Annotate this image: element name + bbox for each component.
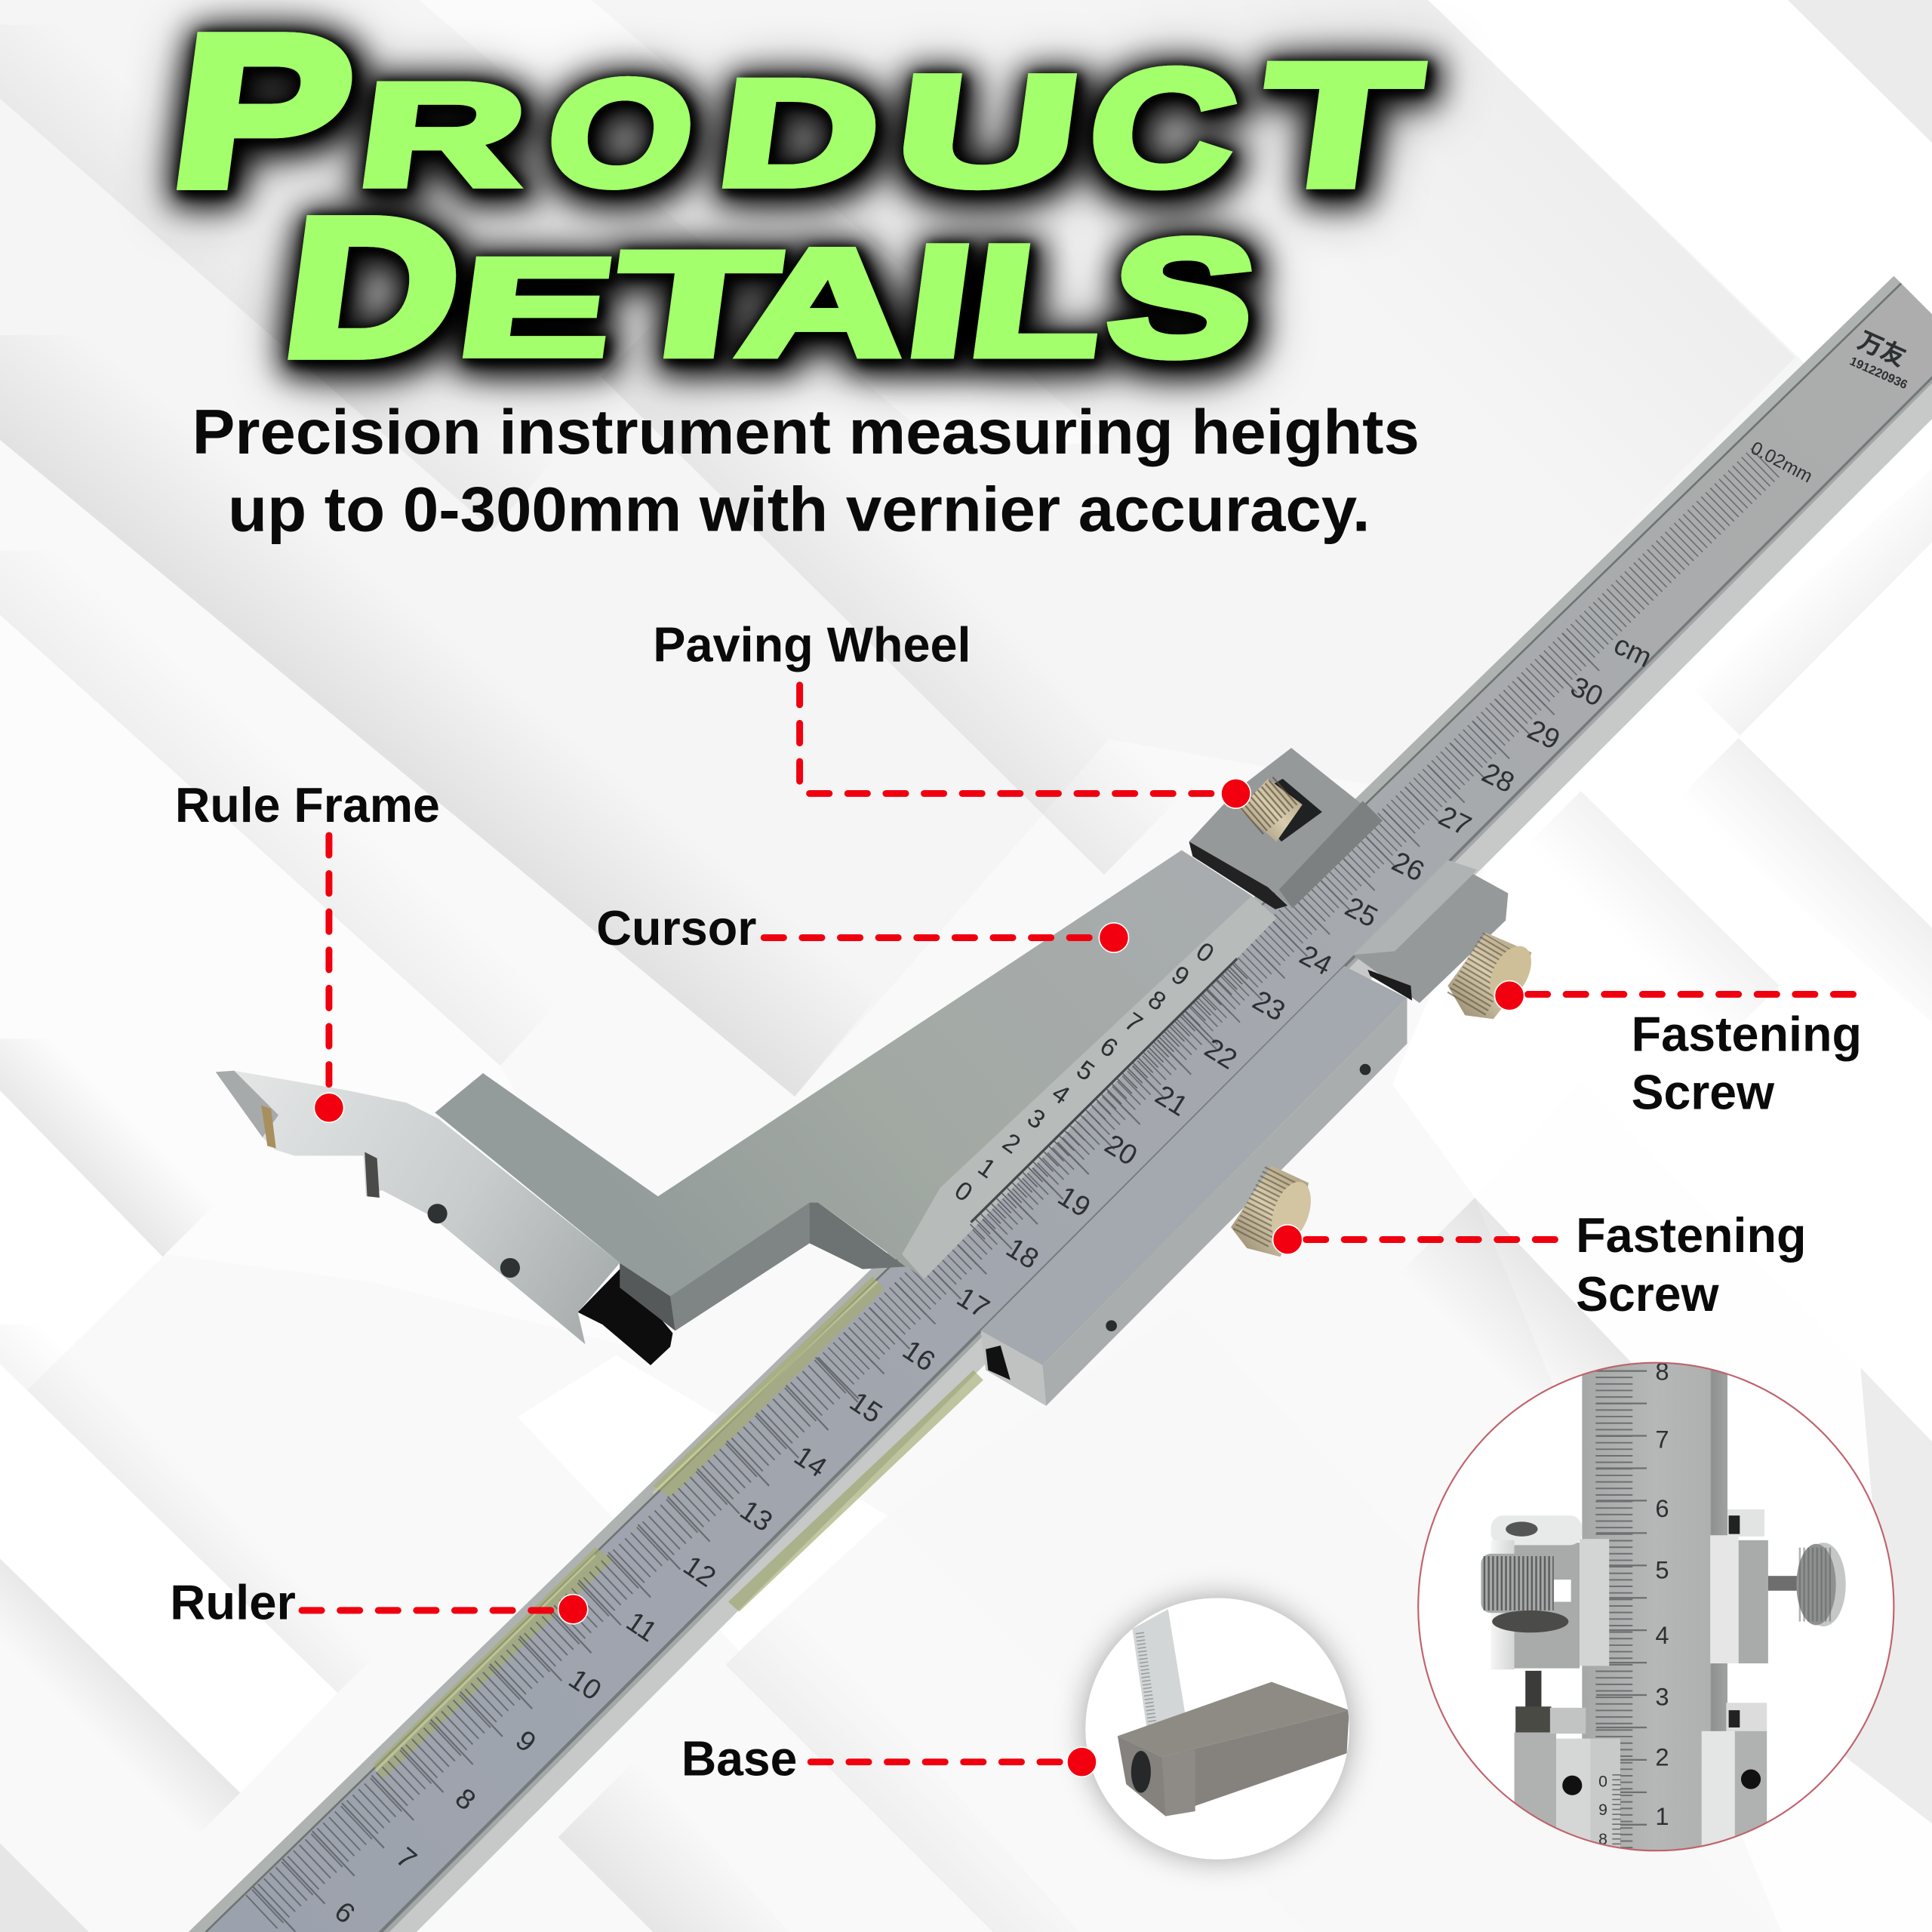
callout: Base: Base — [681, 1731, 797, 1786]
ruler numbers 6 to 30: 27 — [1434, 799, 1476, 841]
height gauge main ruler — [189, 276, 1932, 1932]
inset scale numbers: 9 — [1598, 1801, 1607, 1819]
ruler numbers 6 to 30: 11 — [621, 1605, 663, 1647]
ruler numbers 6 to 30 — [329, 326, 1910, 1930]
callout: Rule Frame — [175, 777, 440, 1122]
title: Product Details: R — [349, 53, 536, 216]
ruler numbers 6 to 30: 21 — [1150, 1078, 1193, 1122]
ruler numbers 6 to 30: 29 — [1523, 713, 1565, 755]
title: Product Details: S — [1098, 206, 1266, 390]
icon: fastening screw lower — [1231, 1165, 1318, 1257]
ruler numbers 6 to 30: 22 — [1199, 1032, 1243, 1075]
icon: paving wheel knurl — [1239, 779, 1303, 841]
ruler numbers 6 to 30: 24 — [1294, 939, 1337, 981]
right lower clamp — [1702, 1703, 1767, 1860]
title: Product Details: D — [273, 178, 473, 397]
ruler numbers 6 to 30: 17 — [952, 1281, 995, 1324]
callout: Fastening Screw lower — [1273, 1208, 1806, 1321]
callout: Fastening Screw lower: Screw — [1576, 1266, 1719, 1321]
ruler numbers 6 to 30: 6 — [329, 1895, 361, 1930]
ruler numbers 6 to 30: 30 — [1566, 670, 1608, 712]
ruler numbers 6 to 30: 8 — [450, 1782, 482, 1817]
title: Product Details: E — [450, 231, 623, 385]
rule frame jaw — [216, 1071, 672, 1365]
inset scale numbers: 0 — [1598, 1773, 1607, 1790]
inset scale numbers: 8 — [1655, 1358, 1669, 1386]
ruler numbers 6 to 30: 10 — [563, 1663, 608, 1706]
ruler numbers 6 to 30: 14 — [789, 1439, 832, 1483]
inset scale numbers: 4 — [1655, 1621, 1669, 1649]
vernier numbers: 2 — [997, 1128, 1026, 1159]
vernier numbers — [949, 937, 1219, 1208]
lower slider block — [981, 966, 1407, 1406]
subtitle — [192, 397, 1420, 545]
upper clamp with paving wheel — [1189, 748, 1383, 909]
ruler numbers 6 to 30: 26 — [1387, 845, 1429, 888]
ruler numbers 6 to 30: 20 — [1100, 1128, 1143, 1171]
title: Product Details: D — [709, 49, 890, 217]
ruler numbers 6 to 30: 13 — [734, 1494, 778, 1537]
callout: Fastening Screw lower: Fastening — [1576, 1208, 1806, 1263]
ruler numbers 6 to 30: 7 — [390, 1841, 423, 1875]
ruler numbers 6 to 30: cm — [1609, 628, 1657, 673]
vernier numbers: 5 — [1071, 1055, 1100, 1087]
inset scale numbers: 1 — [1655, 1802, 1669, 1830]
title: Product Details: L — [960, 213, 1115, 388]
callout: Fastening Screw upper — [1494, 981, 1862, 1119]
ruler numbers 6 to 30: 15 — [844, 1385, 888, 1429]
ruler scale ticks — [261, 462, 1766, 1912]
inset scale numbers: 2 — [1655, 1743, 1669, 1771]
vernier numbers: 7 — [1119, 1007, 1148, 1038]
inset scale numbers: 6 — [1655, 1494, 1669, 1522]
callout: Paving Wheel — [653, 617, 1251, 808]
callout: Ruler — [170, 1574, 588, 1629]
cursor front face — [670, 1202, 810, 1331]
vernier numbers: 1 — [973, 1152, 1001, 1184]
left upper clamp — [1481, 1515, 1609, 1669]
ruler numbers 6 to 30: 万友 — [1854, 326, 1910, 371]
vertical ruler — [1582, 1355, 1727, 1860]
threaded rod and nut — [1515, 1671, 1552, 1734]
vernier numbers: 4 — [1047, 1078, 1075, 1110]
title: Product Details — [160, 0, 1429, 397]
right upper clamp — [1710, 1509, 1846, 1663]
callout: Fastening Screw upper: Screw — [1632, 1064, 1775, 1119]
ruler numbers 6 to 30: 12 — [678, 1549, 721, 1593]
vernier numbers: 0 — [949, 1176, 977, 1208]
callout: Base — [681, 1731, 1097, 1786]
inset scale numbers: 8 — [1598, 1831, 1607, 1848]
title: Product Details: C — [1078, 35, 1247, 220]
lower clamp with fastening screw — [1353, 860, 1540, 1019]
inset scale numbers: 3 — [1655, 1683, 1669, 1711]
title: Product Details: T — [606, 222, 786, 386]
vernier numbers: 6 — [1094, 1032, 1123, 1063]
black end cap — [1131, 1751, 1151, 1793]
left lower clamp — [1515, 1708, 1620, 1862]
ruler numbers 6 to 30: 9 — [510, 1724, 543, 1758]
vernier numbers: 0 — [1191, 937, 1219, 968]
inset photo: vertical gauge close-up — [1418, 1355, 1894, 1862]
vernier numbers: 8 — [1143, 985, 1171, 1017]
vernier numbers: 9 — [1166, 960, 1195, 992]
callout: Paving Wheel: Paving Wheel — [653, 617, 971, 672]
small ruler on base — [1132, 1609, 1185, 1726]
vernier ticks — [977, 968, 1244, 1232]
callout: Rule Frame: Rule Frame — [175, 777, 440, 832]
green tint streaks on ruler — [374, 1276, 983, 1780]
ruler numbers 6 to 30: 28 — [1477, 756, 1519, 798]
title: Product Details: T — [1250, 27, 1429, 222]
subtitle: up to 0-300mm with vernier accuracy. — [228, 475, 1371, 545]
ruler numbers 6 to 30: 0.02mm — [1747, 438, 1816, 487]
icon: fastening screw upper — [1447, 933, 1540, 1019]
ruler numbers 6 to 30: 25 — [1340, 891, 1383, 934]
title: Product Details: O — [538, 49, 704, 217]
inset scale numbers: 7 — [1655, 1425, 1669, 1453]
inset scale numbers — [1598, 1358, 1669, 1848]
ruler numbers 6 to 30: 191220936 — [1847, 355, 1909, 392]
ruler numbers 6 to 30: 18 — [1001, 1232, 1044, 1275]
callout: Ruler: Ruler — [170, 1574, 296, 1629]
left knob — [1481, 1554, 1554, 1613]
callout: Cursor: Cursor — [596, 900, 756, 955]
cursor body with vernier — [435, 851, 1276, 1331]
title: Product Details: A — [731, 218, 918, 387]
black slide bar — [578, 1269, 672, 1365]
ruler numbers 6 to 30: 16 — [897, 1334, 941, 1377]
vernier plate — [902, 896, 1276, 1279]
vernier numbers: 3 — [1022, 1103, 1051, 1135]
callout: Cursor — [596, 900, 1129, 955]
callout: Fastening Screw upper: Fastening — [1632, 1007, 1862, 1062]
base block — [1118, 1682, 1349, 1757]
inset scale numbers: 5 — [1655, 1555, 1669, 1583]
subtitle: Precision instrument measuring heights — [192, 397, 1420, 467]
inset photo: base — [1085, 1598, 1349, 1860]
title: Product Details: U — [885, 43, 1090, 218]
ruler numbers 6 to 30: 19 — [1053, 1180, 1096, 1223]
title: Product Details: I — [897, 214, 983, 389]
ruler numbers 6 to 30: 23 — [1247, 984, 1291, 1027]
